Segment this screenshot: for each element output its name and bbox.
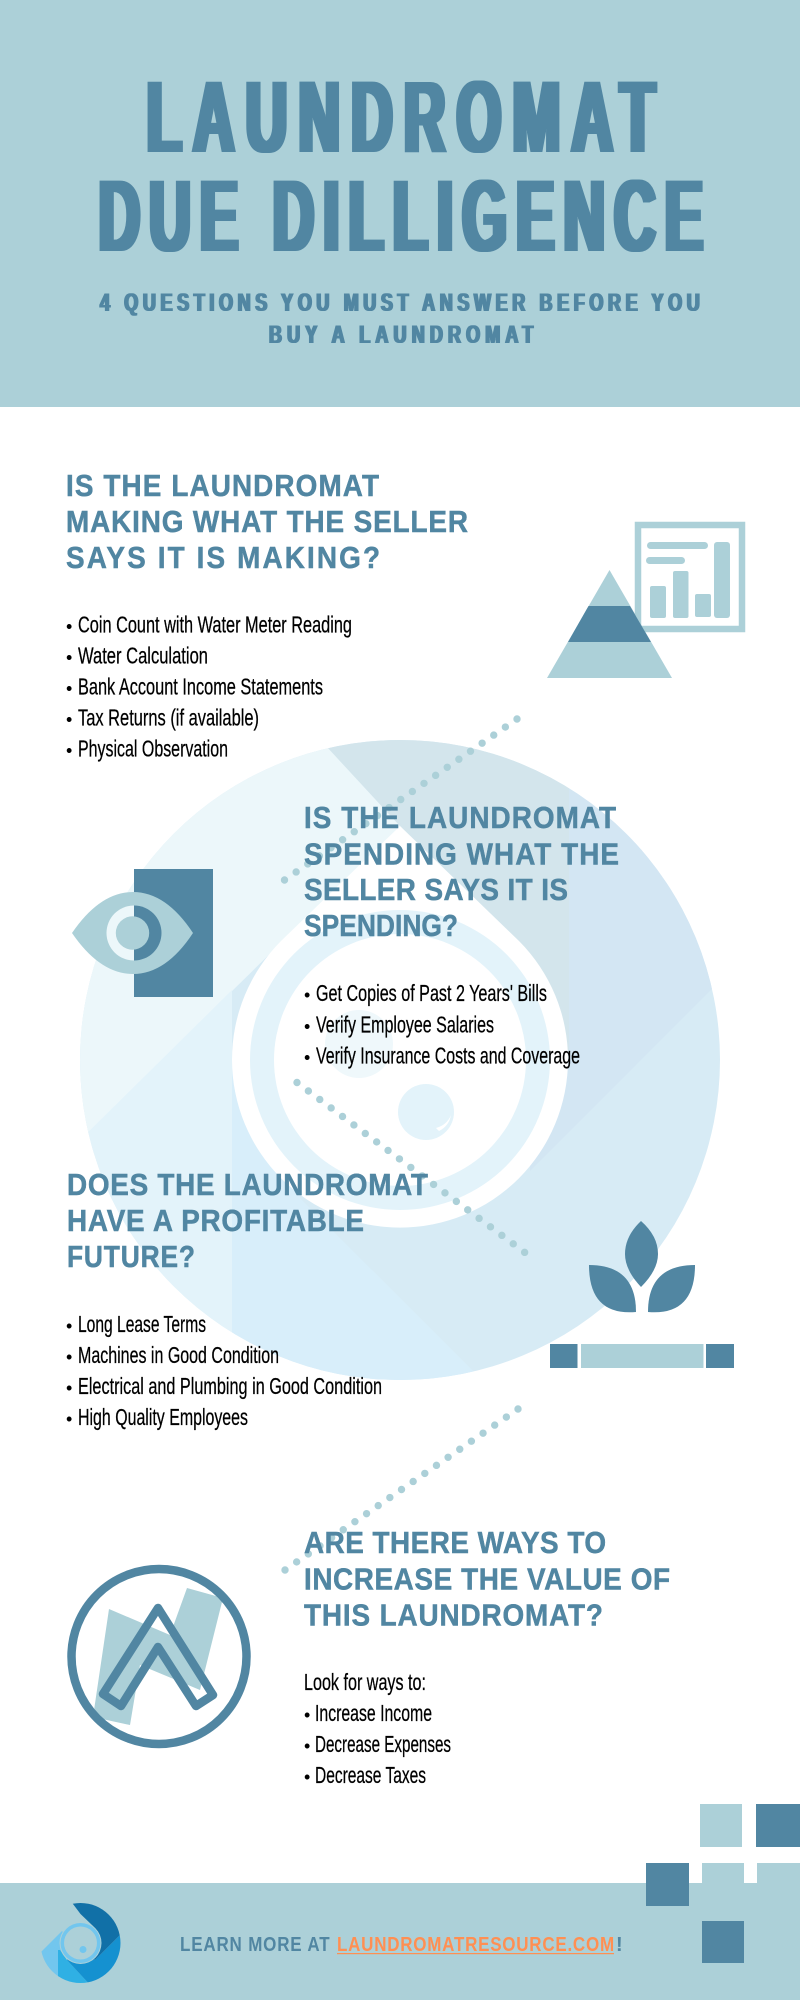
icon: plant xyxy=(550,1221,734,1368)
decorative squares xyxy=(646,1804,800,1963)
dotted connector 2 xyxy=(297,1082,525,1253)
section 2 list: Get Copies of Past 2 Years' Bills xyxy=(316,980,547,1006)
section 2 list: • xyxy=(304,985,310,1005)
section 3 list: • xyxy=(66,1347,72,1367)
section 2 list xyxy=(304,980,580,1068)
section 4 list: • xyxy=(304,1736,310,1756)
section 1 list xyxy=(66,612,352,762)
section 1 list: • xyxy=(66,678,72,698)
section 1 heading: MAKING WHAT THE SELLER xyxy=(66,505,468,539)
section 1 list: Tax Returns (if available) xyxy=(78,704,259,730)
title: LAUNDROMAT xyxy=(147,59,655,174)
subtitle: BUY A LAUNDROMAT xyxy=(269,320,534,349)
section 3 heading: HAVE A PROFITABLE xyxy=(67,1204,364,1238)
icon: chevron in circle xyxy=(72,1569,246,1744)
section 2 list: Verify Insurance Costs and Coverage xyxy=(316,1042,580,1068)
section 2 heading xyxy=(304,801,619,944)
panel: header banner xyxy=(0,0,800,407)
section 3 list: High Quality Employees xyxy=(78,1404,248,1430)
section 1 list: • xyxy=(66,616,72,636)
footer text: LAUNDROMATRESOURCE.COM xyxy=(337,1933,614,1955)
section 1 heading: IS THE LAUNDROMAT xyxy=(66,469,379,503)
section 3 list xyxy=(66,1311,382,1430)
section 4 list: • xyxy=(304,1705,310,1725)
dotted connector 3 xyxy=(285,1409,518,1570)
section 4 heading: ARE THERE WAYS TO xyxy=(304,1526,606,1560)
section 1 heading xyxy=(66,469,468,575)
section 2 heading: IS THE LAUNDROMAT xyxy=(304,801,616,835)
section 4 list: Look for ways to: xyxy=(304,1669,426,1695)
footer text: ! xyxy=(616,1934,623,1956)
footer logo xyxy=(42,1903,120,1983)
section 2 list: • xyxy=(304,1048,310,1068)
section 3 list: Machines in Good Condition xyxy=(78,1342,279,1368)
section 1 list: Physical Observation xyxy=(78,736,228,762)
section 3 list: • xyxy=(66,1316,72,1336)
section 4 heading: THIS LAUNDROMAT? xyxy=(304,1598,603,1633)
section 4 list: Decrease Expenses xyxy=(315,1731,451,1757)
section 1 list: Bank Account Income Statements xyxy=(78,674,323,700)
section 2 heading: SPENDING WHAT THE xyxy=(304,837,619,872)
background logo watermark xyxy=(80,740,720,1380)
section 2 list: Verify Employee Salaries xyxy=(316,1012,494,1038)
section 4 heading: INCREASE THE VALUE OF xyxy=(304,1562,670,1597)
icon: eye xyxy=(72,869,213,997)
subtitle xyxy=(100,288,700,349)
section 4 list: Decrease Taxes xyxy=(315,1762,426,1788)
section 4 list: • xyxy=(304,1767,310,1787)
footer text: LEARN MORE AT xyxy=(180,1933,330,1955)
section 4 list: Increase Income xyxy=(315,1700,432,1726)
section 3 list: Long Lease Terms xyxy=(78,1311,206,1337)
dotted connector 1 xyxy=(284,719,517,880)
section 3 heading: FUTURE? xyxy=(67,1240,195,1275)
section 3 heading xyxy=(67,1168,428,1275)
section 3 list: Electrical and Plumbing in Good Condition xyxy=(78,1373,382,1399)
section 1 list: • xyxy=(66,710,72,730)
title xyxy=(99,59,703,273)
footer text xyxy=(180,1933,623,1956)
section 3 heading: DOES THE LAUNDROMAT xyxy=(67,1168,428,1202)
section 1 list: • xyxy=(66,740,72,760)
section 2 list: • xyxy=(304,1016,310,1036)
section 1 list: • xyxy=(66,648,72,668)
section 3 list: • xyxy=(66,1409,72,1429)
icon: chart and pyramid xyxy=(547,525,742,678)
section 1 list: Coin Count with Water Meter Reading xyxy=(78,612,352,638)
subtitle: 4 QUESTIONS YOU MUST ANSWER BEFORE YOU xyxy=(100,288,700,317)
section 4 list xyxy=(304,1669,451,1788)
section 4 heading xyxy=(304,1526,670,1633)
title: DUE DILLIGENCE xyxy=(99,158,703,273)
section 3 list: • xyxy=(66,1378,72,1398)
panel: footer xyxy=(0,1883,800,2000)
section 2 heading: SELLER SAYS IT IS xyxy=(304,873,568,907)
section 1 list: Water Calculation xyxy=(78,642,208,668)
section 2 heading: SPENDING? xyxy=(304,909,458,944)
section 1 heading: SAYS IT IS MAKING? xyxy=(66,541,380,575)
